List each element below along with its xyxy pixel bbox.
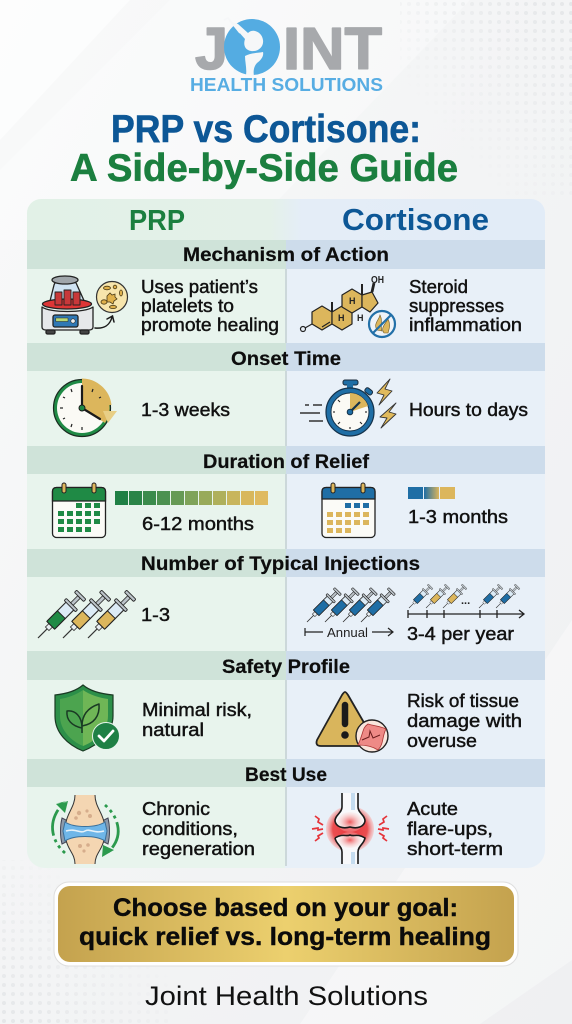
text: PRP mechanism: platelets to — [141, 295, 234, 316]
label: OH: OH — [371, 275, 384, 286]
callout: choose based on your goal — [54, 882, 518, 966]
panel: comparison table — [27, 199, 545, 868]
bar: 12 month progress — [115, 491, 268, 505]
heading: Onset Time: Onset Time — [231, 348, 341, 370]
labels: H: H — [338, 313, 344, 323]
row: Duration of Relief — [27, 446, 545, 538]
text: Chronic conditions, regeneration: regeneration — [142, 838, 255, 859]
text: Chronic conditions, regeneration: Chronic — [142, 798, 210, 819]
icon: warning triangle with damaged tissue — [316, 692, 388, 752]
icon: healthy joint with green arrows — [53, 795, 118, 864]
text: 1-3: 1-3 — [141, 604, 170, 625]
text: Risk of tissue damage with overuse — [407, 690, 522, 751]
icon: centrifuge — [42, 276, 93, 334]
callout: choose based on your goal: quick relief vs. long-term healing — [79, 923, 491, 951]
text: Hours to days: Hours to days — [409, 399, 528, 420]
row: Best Use — [27, 759, 545, 864]
row: Onset Time — [27, 343, 545, 436]
text: Chronic conditions, regeneration — [142, 798, 255, 859]
icon: no inflammation — [369, 311, 395, 337]
text: Acute flare-ups, short-term — [407, 798, 503, 859]
footer: brand name: Joint Health Solutions — [145, 981, 428, 1011]
icon: steroid molecule — [300, 283, 378, 332]
bar: 3 month progress — [408, 487, 455, 499]
text: Minimal risk, natural: Minimal risk, — [142, 699, 252, 720]
text: PRP mechanism — [141, 276, 279, 335]
heading: Duration of Relief: Duration of Relief — [203, 451, 370, 473]
text: Acute flare-ups, short-term: short-term — [407, 838, 503, 859]
text: Minimal risk, natural — [142, 699, 252, 740]
logo: Joint Health Solutions: HEALTH SOLUTIONS — [190, 75, 383, 95]
icon: stopwatch with lightning — [300, 379, 396, 436]
logo: Joint Health Solutions: INT — [283, 16, 382, 82]
icon: three syringes — [32, 589, 137, 644]
text: Minimal risk, natural: natural — [142, 719, 204, 740]
timeline: injection schedule: ... — [461, 595, 470, 607]
icon: four syringes — [303, 587, 396, 626]
icon: blue calendar — [322, 483, 375, 538]
callout: choose based on your goal: Choose based on your goal: — [113, 894, 458, 922]
label: Annual span — [305, 626, 393, 640]
text: Acute flare-ups, short-term: Acute — [407, 798, 458, 819]
text: Risk of tissue damage with overuse: Risk of tissue — [407, 690, 519, 711]
icon: clock with gold wedge — [54, 380, 117, 436]
text: 3-4 per year: 3-4 per year — [407, 623, 514, 644]
text: Cortisone mechanism: Steroid — [409, 276, 468, 297]
text: Risk of tissue damage with overuse: damage with — [407, 710, 522, 731]
heading: Mechanism of Action: Mechanism of Action — [183, 244, 389, 266]
text: Cortisone mechanism: inflammation — [409, 314, 522, 335]
labels: H: H — [357, 313, 364, 323]
row: Safety Profile — [27, 651, 545, 752]
labels: H — [338, 296, 364, 323]
row: Number of Typical Injections — [27, 549, 545, 644]
text: Cortisone mechanism — [409, 276, 522, 335]
label: Annual span: Annual — [327, 626, 368, 640]
timeline: injection schedule — [406, 584, 524, 618]
arrow: to platelets — [95, 316, 114, 328]
text: 1-3 months: 1-3 months — [408, 506, 508, 527]
column header: Cortisone: Cortisone — [342, 202, 489, 237]
title — [70, 108, 458, 190]
text: Risk of tissue damage with overuse: overuse — [407, 730, 477, 751]
icon: green calendar — [52, 483, 106, 538]
title: PRP vs Cortisone: — [111, 108, 421, 151]
row: Mechanism of Action — [27, 240, 545, 337]
heading: Number of Typical Injections: Number of Typical Injections — [141, 553, 420, 575]
icon: knee joint in blue circle — [224, 18, 280, 76]
title: A Side-by-Side Guide — [70, 147, 458, 190]
heading: Best Use: Best Use — [245, 764, 327, 786]
text: PRP mechanism: promote healing — [141, 314, 279, 335]
labels: H: H — [349, 296, 356, 306]
logo: Joint Health Solutions — [190, 16, 383, 95]
text: PRP mechanism: Uses patient’s — [141, 276, 258, 297]
text: Acute flare-ups, short-term: flare-ups, — [407, 818, 493, 839]
logo: Joint Health Solutions: J — [195, 16, 228, 82]
icon: shield with leaf and check — [55, 685, 120, 751]
column header: PRP: PRP — [129, 205, 185, 237]
text: Cortisone mechanism: suppresses — [409, 295, 504, 316]
text: Chronic conditions, regeneration: conditions, — [142, 818, 238, 839]
icon: platelets — [96, 282, 128, 312]
heading: Safety Profile: Safety Profile — [222, 656, 350, 678]
text: 1-3 weeks: 1-3 weeks — [141, 399, 230, 420]
icon: inflamed joint — [312, 793, 389, 864]
text: 6-12 months: 6-12 months — [142, 513, 254, 534]
